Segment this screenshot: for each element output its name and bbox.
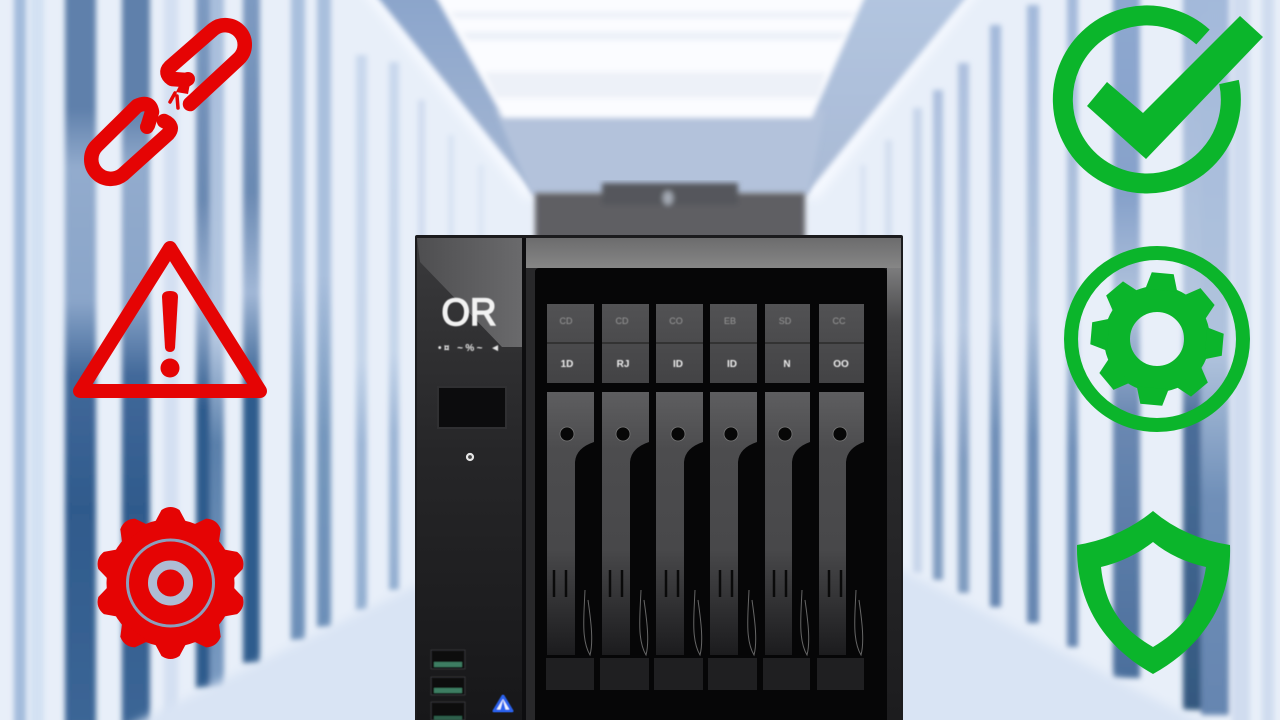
NAS device — [415, 235, 903, 720]
icon: red gear — [93, 507, 248, 659]
drive tray 6 — [817, 304, 864, 690]
small label: •¤ ~%~ ◄ — [438, 343, 500, 354]
ceiling — [360, 0, 982, 200]
top band — [526, 238, 901, 268]
drive tray 5 — [763, 304, 810, 690]
floor — [122, 540, 1215, 720]
drive tray 1 — [546, 304, 594, 690]
drive tray 1: CD — [560, 316, 573, 326]
left rack wall — [14, 0, 484, 720]
drive tray 3: ID — [673, 359, 683, 370]
drive tray 2: CD — [616, 316, 629, 326]
drive bay frame — [535, 268, 887, 720]
blue status icon — [494, 696, 512, 711]
drive tray 5: N — [783, 359, 791, 370]
icon: broken chain — [91, 25, 245, 179]
icon: green check circle — [1063, 15, 1263, 183]
drive tray 4: EB — [724, 316, 736, 326]
corridor end wall — [535, 183, 805, 241]
icon: warning triangle — [80, 248, 260, 391]
USB ports — [431, 650, 465, 720]
power button — [467, 454, 473, 460]
drive tray 5: SD — [779, 316, 792, 326]
logo: OR — [442, 292, 496, 334]
drive tray 2: RJ — [617, 359, 629, 370]
right rack wall — [860, 0, 1274, 720]
drive tray 2 — [600, 304, 649, 690]
drive tray 4 — [708, 304, 757, 690]
icon: green gear in circle — [1071, 253, 1243, 425]
ceiling lights — [432, 0, 868, 118]
drive tray 3: CO — [669, 316, 683, 326]
drive tray 4: ID — [727, 359, 737, 370]
NAS chassis — [415, 235, 903, 720]
display window — [438, 387, 506, 428]
drive tray 3 — [654, 304, 703, 690]
drive tray 6: OO — [833, 359, 849, 370]
drive tray 1: 1D — [561, 359, 573, 370]
drive tray 6: CC — [832, 316, 846, 326]
icon: green shield — [1077, 511, 1230, 674]
left control panel — [417, 238, 526, 720]
